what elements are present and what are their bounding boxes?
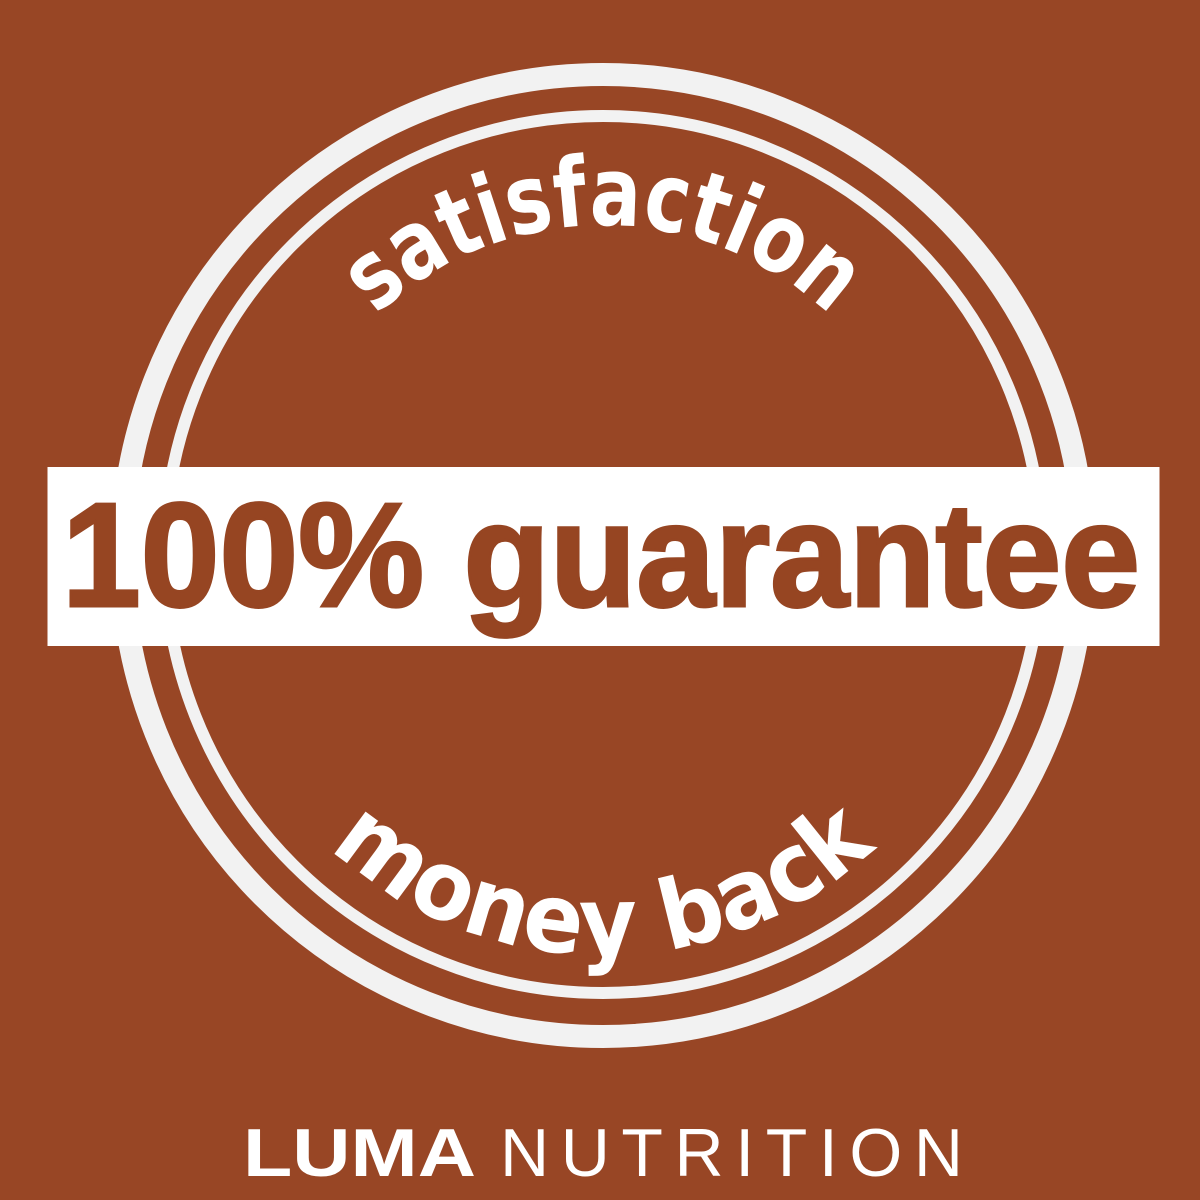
banner text: 100% guarantee (62, 473, 1140, 638)
arc text: money back: money back (334, 808, 878, 976)
logo: NUTRITION (500, 1115, 963, 1191)
outer ring (122, 74, 1084, 1036)
inner ring (164, 116, 1042, 993)
logo: LUMA (243, 1115, 476, 1191)
arc text: satisfaction: satisfaction (350, 152, 854, 311)
logo (243, 1115, 963, 1191)
banner (48, 467, 1160, 646)
